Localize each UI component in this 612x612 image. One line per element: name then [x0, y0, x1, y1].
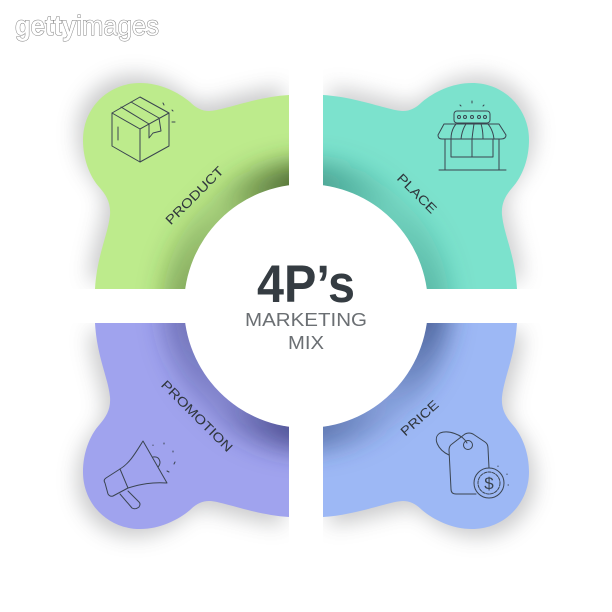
panel: price	[323, 323, 544, 546]
label: product: PRODUCT	[162, 163, 227, 228]
panel: promotion	[68, 323, 289, 546]
icon: box	[112, 97, 175, 162]
label: promotion: PROMOTION	[158, 377, 236, 455]
subtitle: marketing mix: MARKETING	[245, 309, 367, 330]
label: price: PRICE	[397, 397, 442, 439]
icon: price tag with dollar coin: $	[484, 474, 494, 493]
icon: price tag with dollar coin	[436, 432, 508, 498]
watermark: gettyimages: gettyimages	[15, 10, 159, 41]
infographic canvas	[16, 14, 544, 546]
center circle	[184, 184, 428, 428]
subtitle: marketing mix	[245, 309, 367, 353]
panel: place	[323, 66, 544, 289]
label: place: PLACE	[394, 171, 440, 217]
title: 4P's: 4P’s	[257, 255, 355, 314]
panel: product	[68, 66, 289, 289]
subtitle: marketing mix: MIX	[288, 332, 324, 353]
icon: megaphone	[104, 441, 175, 509]
icon: storefront	[438, 101, 506, 170]
